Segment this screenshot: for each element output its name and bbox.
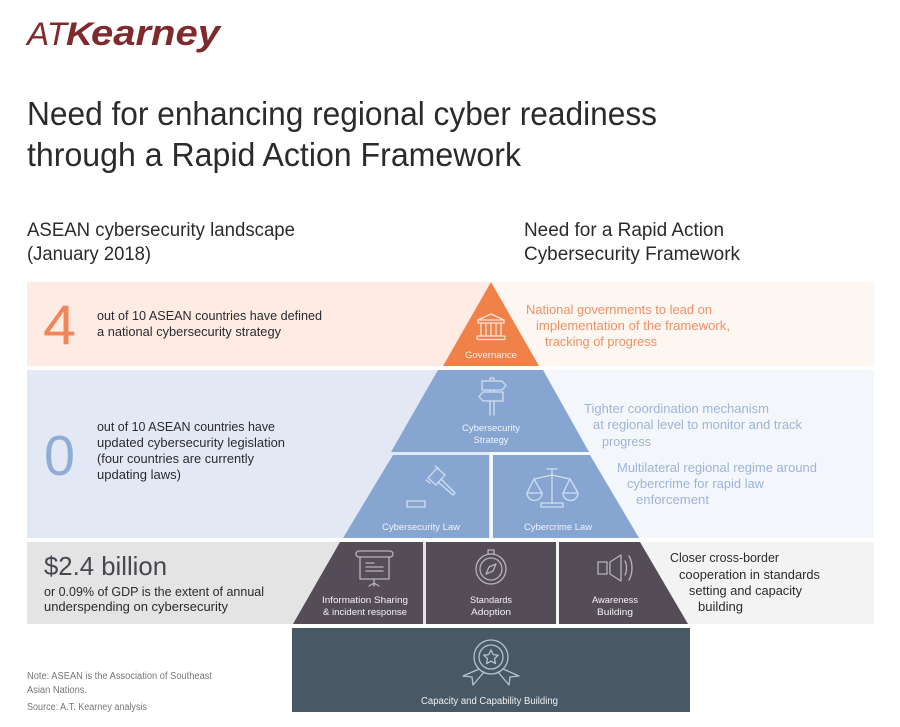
pyramid: standards adoption tier: Standards [470, 595, 512, 606]
right column heading: Need for a Rapid Action [524, 220, 724, 241]
pyramid: capacity and capability building base: Capacity and Capability Building [421, 696, 558, 707]
callout: law: enforcement [636, 493, 710, 507]
pyramid: information sharing tier: & incident response [323, 607, 407, 618]
callout: governance [526, 303, 730, 349]
note and source: Asian Nations. [27, 685, 87, 696]
icon: signpost [479, 378, 506, 415]
logo: A.T. Kearney: AT [25, 16, 70, 52]
pyramid: cybersecurity strategy tier: Cybersecurity [462, 423, 520, 434]
left column heading: (January 2018) [27, 244, 151, 265]
pyramid: governance tier [443, 282, 539, 366]
stat: 0 countries: updated cybersecurity legislation [97, 436, 285, 450]
callout: cooperation: Closer cross-border [670, 551, 779, 565]
left column heading [27, 220, 295, 265]
stat: $2.4 billion: or 0.09% of GDP is the extent of annual [44, 585, 264, 599]
logo: A.T. Kearney: earney [91, 12, 222, 53]
stat: 0 countries: out of 10 ASEAN countries have [97, 420, 275, 434]
panel: spending band [27, 542, 874, 624]
title: through a Rapid Action Framework [27, 136, 521, 173]
pyramid: cybersecurity law tier [343, 455, 489, 538]
callout: law [617, 461, 817, 507]
stat: 4 countries: a national cybersecurity strategy [97, 325, 282, 339]
icon: scales [527, 469, 578, 507]
stat: 4 countries: out of 10 ASEAN countries have defined [97, 309, 322, 323]
pyramid: standards adoption tier [426, 542, 556, 624]
pyramid: cybersecurity strategy tier: Strategy [474, 435, 509, 446]
callout: cooperation: building [698, 600, 743, 614]
icon: gavel [407, 466, 455, 507]
callout: strategy: progress [602, 435, 651, 449]
callout: cooperation: setting and capacity [689, 584, 803, 598]
callout: strategy: at regional level to monitor and track [593, 418, 803, 432]
right column heading [524, 220, 740, 265]
pyramid: standards adoption tier: Adoption [471, 607, 511, 618]
callout: law: Multilateral regional regime around [617, 461, 817, 475]
pyramid: cybersecurity strategy tier [391, 370, 589, 452]
stat: 0 countries: 0 [44, 424, 75, 488]
title: Need for enhancing regional cyber readiness [27, 95, 657, 132]
callout: strategy: Tighter coordination mechanism [584, 402, 769, 416]
stat: 4 countries [43, 293, 322, 356]
callout: cooperation: cooperation in standards [679, 568, 820, 582]
right column heading: Cybersecurity Framework [524, 244, 740, 265]
callout: governance: National governments to lead on [526, 303, 712, 317]
icon: presentation board [356, 551, 393, 586]
stat: 0 countries: (four countries are currently [97, 452, 255, 466]
pyramid: awareness building tier: Awareness [592, 595, 638, 606]
pyramid: cybercrime law tier [493, 455, 639, 538]
stat: $2.4 billion [44, 551, 264, 614]
icon: compass [476, 550, 506, 584]
pyramid: cybercrime law tier: Cybercrime Law [524, 522, 592, 533]
stat: 0 countries [44, 420, 285, 488]
stat: 4 countries: 4 [43, 293, 76, 356]
logo: A.T. Kearney [25, 12, 222, 53]
panel: strategy and law band [27, 370, 874, 538]
pyramid: awareness building tier: Building [597, 607, 633, 618]
title [27, 95, 657, 173]
callout: strategy [584, 402, 803, 449]
callout: law: cybercrime for rapid law [627, 477, 765, 491]
icon: speaker [598, 555, 632, 581]
stat: $2.4 billion: $2.4 billion [44, 551, 167, 581]
callout: cooperation [670, 551, 820, 614]
note and source: Note: ASEAN is the Association of Southeast [27, 671, 212, 682]
pyramid: governance tier: Governance [465, 350, 517, 361]
pyramid: awareness building tier [559, 542, 688, 624]
stat: $2.4 billion: underspending on cybersecurity [44, 600, 229, 614]
callout: governance: implementation of the framework, [536, 319, 730, 333]
callout: governance: tracking of progress [545, 335, 657, 349]
icon: government building [477, 314, 505, 340]
icon: award rosette [463, 640, 519, 685]
panel: governance band [27, 282, 874, 366]
pyramid: cybersecurity law tier: Cybersecurity Law [382, 522, 460, 533]
note and source: Source: A.T. Kearney analysis [27, 702, 147, 713]
left column heading: ASEAN cybersecurity landscape [27, 220, 295, 241]
pyramid: capacity and capability building base [292, 628, 690, 712]
pyramid: information sharing tier: Information Sharing [322, 595, 408, 606]
stat: 0 countries: updating laws) [97, 468, 181, 482]
logo: A.T. Kearney: K [66, 16, 96, 52]
pyramid: information sharing tier [293, 542, 423, 624]
note and source [27, 671, 212, 713]
